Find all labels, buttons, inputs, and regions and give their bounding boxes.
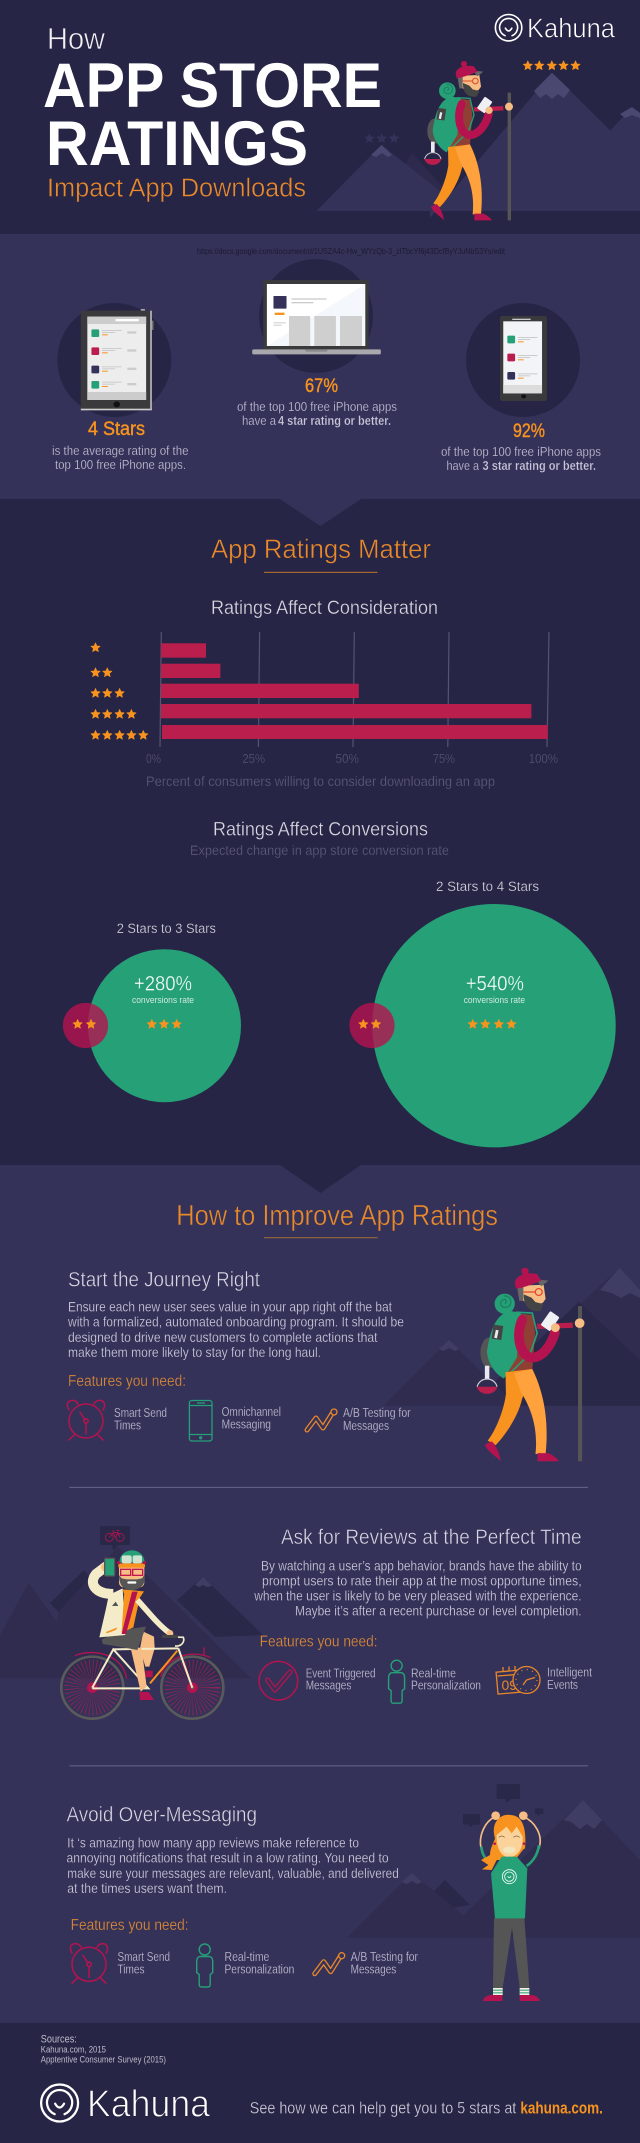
axis labels: 25% xyxy=(242,751,265,766)
fenders xyxy=(75,1647,211,1678)
arrow: stats band pointer xyxy=(280,499,361,526)
arms xyxy=(480,1817,540,1866)
feature: smart send times xyxy=(70,1944,170,1983)
bubble label: 2 Stars to 4 Stars xyxy=(436,879,539,894)
rear leg xyxy=(140,1632,155,1677)
stat description: is the average rating of the xyxy=(52,444,189,458)
heading: features you need: Features you need: xyxy=(260,1634,378,1651)
feature: real-time personalization xyxy=(197,1944,294,1987)
feature label xyxy=(351,1950,418,1976)
logo: Kahuna xyxy=(495,12,615,43)
five star rating xyxy=(523,61,580,70)
shirt logo xyxy=(502,1870,516,1884)
stat description: top 100 free iPhone apps. xyxy=(55,458,186,472)
icon: tablet xyxy=(81,309,153,410)
heading: Ask for Reviews at the Perfect Time: Ask for Reviews at the Perfect Time xyxy=(281,1526,582,1549)
panel: how to improve xyxy=(0,1165,640,2023)
band background xyxy=(0,234,640,499)
stat value: 4 Stars xyxy=(88,419,145,440)
text block: journey: with a formalized, automated onboarding program. It should be xyxy=(67,1314,404,1330)
circle backdrop xyxy=(57,303,171,417)
heading: Ratings Affect Conversions xyxy=(190,819,449,858)
feature label: Real-time xyxy=(411,1666,456,1680)
text block: journey: Ensure each new user sees value in your app right off the bat xyxy=(68,1299,392,1315)
feature label: Times xyxy=(118,1962,144,1976)
value caption: conversions rate xyxy=(464,995,525,1006)
speech bubbles xyxy=(463,1784,543,1827)
text block: journey xyxy=(67,1299,404,1360)
feature label xyxy=(118,1950,170,1976)
feature label: Messaging xyxy=(222,1417,271,1431)
heading: App Ratings Matter: App Ratings Matter xyxy=(211,534,431,564)
back wheel xyxy=(61,1657,123,1719)
chart: 2 stars to 3 stars bubble xyxy=(63,921,241,1102)
stat description xyxy=(52,444,189,472)
axis labels: 75% xyxy=(433,751,455,766)
axis caption: Percent of consumers willing to consider downloading an app xyxy=(146,773,495,789)
panel: header xyxy=(43,12,640,220)
shirt xyxy=(491,1857,527,1918)
shoes xyxy=(483,1995,540,2001)
text block: reviews: prompt users to rate their app at the most opportune times, xyxy=(262,1572,582,1588)
text block: reviews: when the user is likely to be very pleased with the experience. xyxy=(253,1587,582,1603)
panel: stats band xyxy=(0,234,640,499)
axis labels: 0% xyxy=(146,751,161,766)
stars xyxy=(359,1020,516,1028)
text block: over-messaging: make sure your messages are relevant, valuable, and delivered xyxy=(67,1865,399,1881)
stars xyxy=(73,1020,181,1028)
feature label: Times xyxy=(114,1419,141,1433)
icon: phone xyxy=(189,1400,212,1441)
grid lines xyxy=(160,632,549,747)
feature: real-time personalization xyxy=(389,1660,481,1703)
sources: Kahuna.com, 2015 xyxy=(41,2044,106,2055)
icon: chart line xyxy=(315,1953,345,1974)
bike frame xyxy=(92,1637,192,1688)
feature label: Personalization xyxy=(224,1962,294,1976)
hands xyxy=(491,1811,528,1820)
handlebar arm xyxy=(137,1600,169,1633)
feature label: Event Triggered xyxy=(306,1666,376,1680)
feature: a/b testing xyxy=(307,1406,411,1433)
feature label: Omnichannel xyxy=(222,1405,281,1419)
arrow: section pointer xyxy=(280,1165,361,1193)
hands and grip xyxy=(101,1563,178,1638)
heading: features you need: Features you need: xyxy=(68,1373,186,1390)
hair xyxy=(481,1815,525,1870)
feature label xyxy=(411,1666,481,1693)
heading: Avoid Over-Messaging: Avoid Over-Messaging xyxy=(66,1804,257,1827)
feature label xyxy=(114,1406,167,1433)
heading: Ratings Affect Consideration: Ratings Affect Consideration xyxy=(211,598,438,619)
heading: Ratings Affect Conversions: Expected change in app store conversion rate xyxy=(190,842,449,858)
icon: check circle xyxy=(259,1661,298,1700)
panel: footer xyxy=(41,2033,603,2126)
shorts xyxy=(102,1627,146,1650)
icon: alarm clock xyxy=(70,1944,108,1983)
stat description: of the top 100 free iPhone apps xyxy=(237,400,397,414)
feature label: Intelligent xyxy=(547,1666,592,1680)
logo: Kahuna: Kahuna xyxy=(527,12,615,43)
feature: omnichannel messaging xyxy=(189,1400,281,1441)
sources: Sources: xyxy=(41,2033,77,2045)
heading: Ratings Affect Conversions: Ratings Affect Conversions xyxy=(213,819,428,840)
chart: 2 stars to 4 stars bubble xyxy=(349,879,616,1147)
icon: laptop xyxy=(252,280,381,354)
illustration: woman xyxy=(463,1784,543,2001)
text block: journey: designed to drive new customers to complete actions that xyxy=(68,1329,378,1345)
text block: over-messaging xyxy=(66,1835,399,1896)
front leg xyxy=(130,1645,154,1700)
small red circle xyxy=(63,1003,108,1048)
circle backdrop xyxy=(259,259,373,373)
feature label: Real-time xyxy=(224,1950,269,1964)
stat description: have a xyxy=(446,459,479,473)
raised arm xyxy=(93,1566,113,1594)
value caption: conversions rate xyxy=(132,995,194,1006)
feature label xyxy=(222,1405,281,1431)
call to action: kahuna.com. xyxy=(520,2098,603,2117)
feature label xyxy=(224,1950,294,1976)
feature: smart send times xyxy=(67,1400,167,1440)
feature label: Messages xyxy=(343,1419,389,1433)
feature label: Messages xyxy=(306,1679,351,1693)
stat: 4 stars tablet xyxy=(52,303,189,472)
large green circle xyxy=(372,904,616,1147)
text block: journey: make them more likely to stay for the long haul. xyxy=(68,1344,321,1360)
value: +540% xyxy=(466,973,524,996)
text block: reviews xyxy=(253,1557,582,1618)
circle backdrop xyxy=(466,303,580,417)
text block: over-messaging: It ‘s amazing how many app reviews make reference to xyxy=(67,1835,359,1851)
feature label: Smart Send xyxy=(118,1950,170,1964)
stat value: 92% xyxy=(513,421,545,442)
feature label xyxy=(547,1666,592,1692)
title: How xyxy=(47,21,106,56)
call to action: See how we can help get you to 5 stars at xyxy=(250,2098,517,2117)
text block: reviews: By watching a user’s app behavior, brands have the ability to xyxy=(261,1557,582,1573)
sources xyxy=(41,2033,166,2065)
icon: alarm clock xyxy=(67,1400,105,1440)
socks xyxy=(493,1988,529,1995)
axis labels: 100% xyxy=(529,751,558,766)
sources: Apptentive Consumer Survey (2015) xyxy=(41,2054,166,2065)
legs xyxy=(493,1918,529,1988)
stat: 67% laptop xyxy=(237,259,397,428)
title: APP STORE xyxy=(43,51,382,121)
feature: a/b testing xyxy=(315,1950,418,1976)
title: RATINGS xyxy=(46,109,308,179)
text block: over-messaging: annoying notifications that result in a low rating. You need to xyxy=(66,1850,389,1866)
mountains: reviews section xyxy=(0,1547,263,1678)
face xyxy=(493,1827,525,1857)
text block: reviews: Maybe it’s after a recent purchase or level completion. xyxy=(295,1602,582,1618)
illustration: cyclist xyxy=(61,1526,223,1719)
down tube xyxy=(150,1651,177,1683)
heading: How to Improve App Ratings: How to Improve App Ratings xyxy=(176,1200,498,1232)
speech bubble with bike icon xyxy=(100,1526,130,1551)
feature label: A/B Testing for xyxy=(351,1950,418,1964)
feature label: Events xyxy=(547,1678,578,1692)
bubble label: 2 Stars to 3 Stars xyxy=(117,921,216,936)
axis labels: 50% xyxy=(336,751,359,766)
stat description: 3 star rating or better. xyxy=(482,459,596,473)
faint stars behind mountains xyxy=(365,134,399,142)
logo: Kahuna: Kahuna xyxy=(87,2084,211,2126)
heading: features you need: Features you need: xyxy=(71,1917,189,1934)
phone xyxy=(105,1558,115,1576)
feature: intelligent events xyxy=(496,1666,592,1694)
axis labels xyxy=(146,751,558,766)
feature label: Messages xyxy=(351,1962,396,1976)
text block: over-messaging: at the times users want them. xyxy=(67,1880,227,1896)
feature label: Smart Send xyxy=(114,1406,167,1420)
illustration: hiker xyxy=(477,1268,584,1461)
stat description: 4 star rating or better. xyxy=(278,414,391,428)
feature label xyxy=(343,1406,411,1433)
stat description xyxy=(237,400,397,428)
jacket xyxy=(99,1588,125,1637)
stat description: of the top 100 free iPhone apps xyxy=(441,445,601,459)
stat description xyxy=(441,445,601,473)
star labels xyxy=(91,643,148,739)
stat description: have a xyxy=(242,414,276,428)
heading: Start the Journey Right: Start the Journey Right xyxy=(68,1269,260,1292)
value: +280% xyxy=(134,973,192,996)
icon: chart line xyxy=(307,1409,337,1430)
feature label: Personalization xyxy=(411,1679,481,1693)
title: Impact App Downloads xyxy=(47,174,306,202)
front wheel xyxy=(161,1657,223,1719)
icon: phone xyxy=(500,316,547,401)
feature: event triggered messages xyxy=(259,1661,376,1700)
bars xyxy=(161,643,548,739)
large green circle xyxy=(88,949,241,1102)
icon: calendar and clock: 09 xyxy=(502,1677,517,1693)
mountains: journey section xyxy=(384,1268,640,1406)
bar chart: consideration xyxy=(91,632,558,789)
source url: https://docs.google.com/document/d/1USZA4c-Hw_WYzQb-3_zITbcYf6j43DcfByYJuNbS3Ys/edit xyxy=(197,246,506,256)
icon: person xyxy=(197,1944,213,1987)
illustration: hiker xyxy=(424,61,513,220)
shirt and scarf xyxy=(106,1589,144,1634)
panel background xyxy=(0,1165,640,2023)
logo: Kahuna xyxy=(41,2084,211,2126)
stat: 92% phone xyxy=(441,303,601,473)
mountains: header backdrop xyxy=(316,73,640,218)
icon: person xyxy=(389,1660,405,1703)
small red circle xyxy=(349,1003,395,1048)
title xyxy=(43,21,382,202)
mountains: over-messaging section xyxy=(347,1800,640,1938)
stat value: 67% xyxy=(305,376,338,397)
head xyxy=(117,1550,146,1590)
feature label xyxy=(306,1666,376,1693)
feature label: A/B Testing for xyxy=(343,1406,411,1420)
